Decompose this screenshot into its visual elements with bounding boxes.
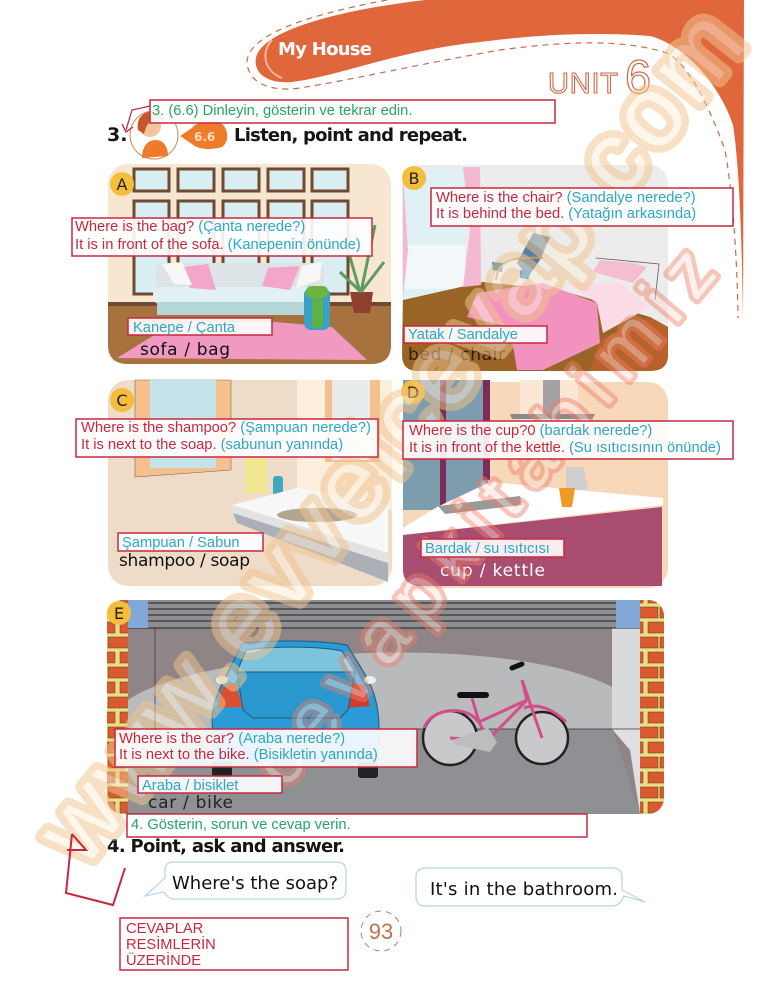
badge E: E — [114, 604, 124, 623]
speech bubble: answer: It's in the bathroom. — [430, 879, 618, 900]
title: My House: My House — [278, 39, 372, 60]
badge A: A — [117, 175, 128, 194]
page number 93 — [361, 911, 401, 951]
badge A — [110, 172, 134, 196]
vocabulary box E — [138, 776, 282, 794]
translation box exercise 3 — [150, 100, 555, 123]
translation box D: Where is the cup?0 (bardak nerede?) — [409, 423, 652, 439]
panel C: bathroom — [108, 380, 392, 586]
label: bed / chair: bed / chair — [408, 345, 505, 365]
vocabulary box C: Şampuan / Sabun — [122, 535, 240, 551]
watermark: red site text: cevapkitabimiz — [234, 231, 731, 801]
translation box E — [115, 729, 417, 767]
label: car / bike: car / bike — [148, 793, 233, 813]
heading: listen point repeat: Listen, point and repeat. — [234, 125, 468, 146]
unit number: 6 — [625, 50, 651, 103]
translation box A: Where is the bag? (Çanta nerede?) — [75, 219, 305, 235]
section 3 number: 3. — [107, 124, 127, 146]
answers note box — [120, 918, 348, 970]
translation box B: Where is the chair? (Sandalye nerede?) — [436, 190, 696, 206]
header banner — [247, 0, 744, 320]
translation box E: Where is the car? (Araba nerede?) — [119, 731, 345, 747]
audio badge 6.6: 6.6 — [194, 130, 215, 144]
section 4 heading: 4. Point, ask and answer. — [107, 836, 345, 857]
translation box exercise 3: 3. (6.6) Dinleyin, gösterin ve tekrar edin. — [152, 103, 412, 119]
bicycle — [423, 664, 568, 765]
audio badge 6.6 — [180, 121, 227, 149]
translation box exercise 4: 4. Gösterin, sorun ve cevap verin. — [131, 817, 351, 833]
vocabulary box A: Kanepe / Çanta — [133, 320, 236, 336]
page number 93: 93 — [369, 919, 393, 944]
vocabulary box B: Yatak / Sandalye — [408, 327, 518, 343]
translation box C: It is next to the soap. (sabunun yanında) — [81, 437, 343, 453]
badge B — [402, 166, 426, 190]
badge E — [107, 601, 131, 625]
vocabulary box E: Araba / bisiklet — [142, 778, 238, 794]
answers note box: CEVAPLAR — [126, 921, 203, 937]
speech bubble: question — [145, 862, 346, 899]
translation box A: It is in front of the sofa. (Kanepenin önünde) — [75, 237, 361, 253]
translation box exercise 4 — [127, 814, 587, 837]
car — [212, 641, 379, 778]
answers note box: RESİMLERİN — [126, 935, 216, 953]
answers note box: ÜZERİNDE — [126, 951, 201, 969]
badge C — [110, 388, 134, 412]
label: cup / kettle: cup / kettle — [440, 561, 545, 581]
panel B: bedroom — [402, 165, 668, 371]
badge D — [401, 380, 425, 404]
panel E: garage — [107, 600, 664, 814]
badge B: B — [409, 169, 419, 188]
translation box B: It is behind the bed. (Yatağın arkasında) — [436, 206, 696, 222]
unit label: UNIT — [548, 68, 618, 100]
mascot icon — [130, 111, 178, 159]
label: shampoo / soap: shampoo / soap — [119, 551, 250, 571]
translation box D: It is in front of the kettle. (Su ısıtıcısının önünde) — [409, 440, 721, 456]
badge D: D — [407, 383, 419, 402]
panel D: kitchen — [403, 380, 668, 588]
translation box C: Where is the shampoo? (Şampuan nerede?) — [81, 420, 371, 436]
translation box E: It is next to the bike. (Bisikletin yanında) — [119, 747, 378, 763]
translation box C — [76, 419, 378, 457]
watermark: orange site text: www.evvelcevap.com — [13, 0, 765, 885]
translation box D — [403, 421, 733, 459]
vocabulary box A — [128, 318, 272, 336]
panel A: living room — [108, 164, 391, 364]
translation box B — [431, 188, 733, 226]
translation box A — [72, 218, 372, 256]
vocabulary box D: Bardak / su ısıtıcısı — [425, 541, 550, 557]
badge C: C — [116, 391, 128, 410]
red arrow near exercise 4 — [66, 834, 125, 905]
red arrow near exercise 3 — [122, 106, 150, 132]
speech bubble: answer — [416, 868, 645, 906]
speech bubble: question: Where's the soap? — [172, 873, 338, 894]
label: sofa / bag: sofa / bag — [140, 340, 230, 360]
